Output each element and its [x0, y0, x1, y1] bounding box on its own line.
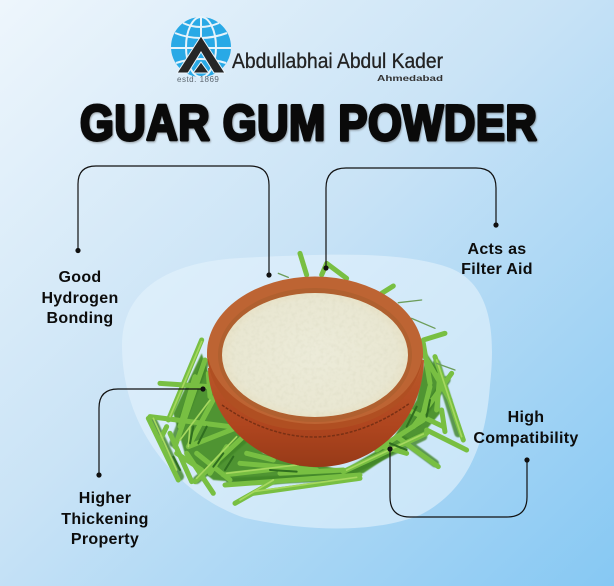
- connector: good hydrogen bonding: [76, 166, 271, 277]
- connector: high compatibility: [388, 447, 529, 517]
- icon: globe: [171, 17, 231, 77]
- product image: bowl on guar beans: [148, 253, 467, 503]
- bowl ridge: [222, 403, 410, 437]
- company name: Abdullabhai Abdul Kader: [232, 50, 443, 73]
- connector: higher thickening property: [97, 387, 205, 477]
- powder: [222, 293, 408, 417]
- estd label: estd. 1869: [177, 75, 219, 84]
- label: high compatibility: Compatibility: [473, 430, 579, 447]
- label: good hydrogen bonding: Bonding: [47, 310, 113, 327]
- label: higher thickening property: Thickening: [61, 511, 149, 528]
- logo: [171, 17, 443, 84]
- label: higher thickening property: Higher: [79, 490, 131, 507]
- guar beans: [148, 253, 467, 503]
- light blob behind product: [122, 255, 492, 529]
- bowl body: [208, 360, 424, 467]
- city label: Ahmedabad: [377, 73, 443, 83]
- label: higher thickening property: Property: [71, 531, 139, 548]
- icon: mountain mark: [177, 36, 225, 73]
- bowl rim: [207, 276, 423, 430]
- title: GUAR GUM POWDER: [80, 95, 537, 151]
- bowl inner wall: [218, 288, 412, 422]
- label: high compatibility: High: [508, 409, 544, 426]
- connector: acts as filter aid: [324, 168, 498, 270]
- label: acts as filter aid: Filter Aid: [461, 261, 533, 278]
- label: good hydrogen bonding: Good: [59, 269, 101, 286]
- label: acts as filter aid: Acts as: [467, 241, 527, 258]
- label: good hydrogen bonding: Hydrogen: [41, 290, 119, 307]
